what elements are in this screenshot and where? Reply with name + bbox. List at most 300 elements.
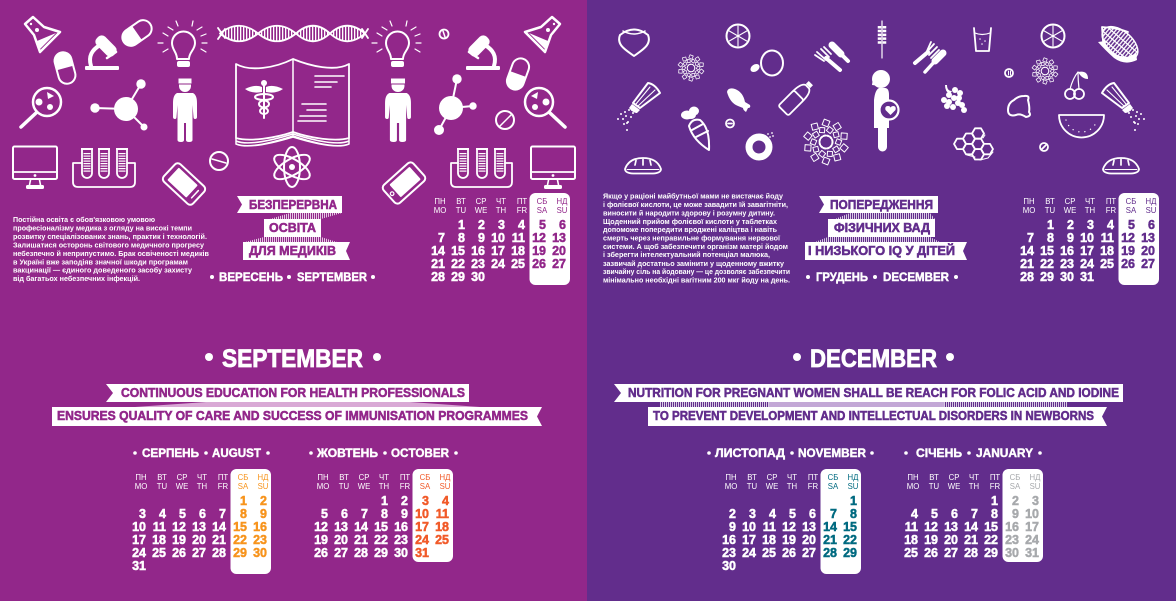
calendar: December 2015: 3: [1087, 218, 1094, 232]
text block: September description: [13, 215, 209, 283]
calendar: October 2015: 20: [334, 533, 348, 547]
calendar: October 2015: FR: [400, 482, 411, 491]
text block: December description: [603, 192, 790, 284]
calendar: October 2015: 8: [381, 507, 388, 521]
calendar: September 2015: TU: [456, 206, 467, 215]
calendar: January 2016: 2: [1012, 494, 1019, 508]
icon: cherries: [1065, 72, 1088, 99]
calendar: September 2015: 3: [498, 218, 505, 232]
text block: September description: Постійна освіта є обов'язковою умовою: [13, 215, 155, 224]
calendar: August 2015: 7: [219, 507, 226, 521]
calendar: November 2015: 14: [823, 520, 837, 534]
calendar: October 2015: 1: [381, 494, 388, 508]
calendar: August 2015: НД: [258, 473, 269, 482]
calendar: September 2015: [431, 193, 570, 285]
title: September: SEPTEMBER: [222, 345, 363, 373]
calendar: November 2015: 11: [763, 520, 776, 534]
icon: test tubes left: [73, 148, 135, 187]
calendar: November 2015: НД: [848, 473, 859, 482]
calendar: October 2015: TH: [379, 482, 389, 491]
month line: September: [210, 270, 375, 284]
calendar: October 2015: 4: [442, 494, 449, 508]
calendar: September 2015: 1: [458, 218, 465, 232]
month line: September: SEPTEMBER: [297, 270, 367, 284]
calendar: January 2016: 12: [924, 520, 938, 534]
calendar: October 2015: 12: [314, 520, 328, 534]
calendar: December 2015: 16: [1060, 244, 1074, 258]
calendar: September 2015: СБ: [537, 197, 547, 206]
icon: pill upper left: [53, 50, 77, 86]
calendar: August 2015: TH: [197, 482, 207, 491]
calendar: November 2015: 7: [830, 507, 837, 521]
text block: September description: вакцинації — єдиного доведеного засобу захисту: [13, 266, 193, 275]
calendar: January 2016: TH: [969, 482, 979, 491]
icon: citrus right: [1042, 24, 1064, 48]
ribbon heading: December Ukrainian: [805, 196, 967, 260]
calendar: October 2015: SU: [440, 482, 451, 491]
calendar: August 2015: 23: [253, 533, 267, 547]
calendar: November 2015: 27: [802, 546, 816, 560]
ribbon: December English: NUTRITION FOR PREGNANT WOMEN SHALL BE REACH FOR FOLIC ACID AND IODINE: [628, 386, 1119, 400]
calendar: November 2015: 16: [722, 533, 736, 547]
calendar: October 2015: 11: [436, 507, 449, 521]
icon: test tubes right: [451, 148, 512, 187]
calendar: November 2015: 1: [850, 494, 857, 508]
calendar: September 2015: 11: [512, 231, 525, 245]
calendar: October 2015: 3: [422, 494, 429, 508]
calendar: September 2015: 5: [539, 218, 546, 232]
calendar: September 2015: SA: [537, 206, 548, 215]
calendar: September 2015: WE: [475, 206, 487, 215]
calendar: August 2015: 6: [199, 507, 206, 521]
calendar: November 2015: 21: [823, 533, 837, 547]
icon: citrus left: [726, 24, 750, 48]
icon: chestnut: [619, 30, 649, 56]
calendar: October 2015: 27: [334, 546, 348, 560]
calendar: September 2015: 19: [532, 244, 546, 258]
calendar: November 2015: СР: [767, 473, 777, 482]
calendar: January 2016: 17: [1025, 520, 1039, 534]
calendar: September 2015: 23: [471, 257, 485, 271]
calendar: December 2015: WE: [1064, 206, 1076, 215]
calendar: September 2015: 13: [552, 231, 566, 245]
calendar: September 2015: 9: [478, 231, 485, 245]
calendar: October 2015: 19: [314, 533, 328, 547]
calendar: August 2015: MO: [135, 482, 147, 491]
calendar: December 2015: MO: [1023, 206, 1035, 215]
icon: magnifier right: [525, 88, 565, 127]
icons: medical illustration group: [13, 17, 575, 206]
calendar: January 2016: 5: [931, 507, 938, 521]
calendar: December 2015: 7: [1027, 231, 1034, 245]
icon: doctor right: [385, 78, 411, 142]
text block: September description: в Україні вже заподіяв значної шкоди програмам: [13, 257, 188, 266]
calendar: November 2015: TU: [747, 482, 758, 491]
calendar: September 2015: НД: [557, 197, 568, 206]
calendar: October 2015: 21: [354, 533, 368, 547]
calendar: October 2015: 9: [401, 507, 408, 521]
calendar: January 2016: 24: [1025, 533, 1039, 547]
calendar: September 2015: 30: [471, 270, 485, 284]
calendar: September 2015: 25: [511, 257, 525, 271]
calendar: September 2015: СР: [476, 197, 486, 206]
calendar: November 2015: 29: [843, 546, 857, 560]
calendar: August 2015: 2: [260, 494, 267, 508]
calendar: January 2016: 18: [904, 533, 918, 547]
calendar: December 2015: 2: [1067, 218, 1074, 232]
calendar: November 2015: 19: [782, 533, 796, 547]
calendar: December 2015: 26: [1121, 257, 1135, 271]
calendar: December 2015: 6: [1148, 218, 1155, 232]
calendar: October 2015: НД: [440, 473, 451, 482]
month line: November: ЛИСТОПАД: [715, 446, 785, 460]
calendar: December 2015: [1020, 193, 1159, 285]
calendar: December 2015: 5: [1128, 218, 1135, 232]
icon: chicken leg: [727, 88, 750, 112]
calendar: August 2015: 20: [192, 533, 206, 547]
icons: nutrition illustration group: [618, 20, 1144, 173]
calendar: January 2016: ПН: [907, 473, 919, 482]
calendar: November 2015: 25: [762, 546, 776, 560]
calendar: August 2015: 1: [240, 494, 247, 508]
calendar: December 2015: FR: [1106, 206, 1117, 215]
calendar: October 2015: 30: [394, 546, 408, 560]
calendar: January 2016: 26: [924, 546, 938, 560]
icon: pill top: [119, 17, 155, 49]
month line: December: ГРУДЕНЬ: [816, 270, 868, 284]
text block: December description: смерть через неправильне формування нервової: [603, 234, 781, 242]
ribbon heading: December Ukrainian: ФІЗИЧНИХ ВАД: [834, 221, 930, 235]
calendar: January 2016: WE: [948, 482, 960, 491]
calendar: October 2015: [314, 469, 453, 562]
icon: small tablet right top: [1005, 69, 1013, 77]
calendar: December 2015: SA: [1126, 206, 1137, 215]
calendar: November 2015: 9: [729, 520, 736, 534]
icon: carrot: [681, 106, 709, 150]
calendar: October 2015: 5: [321, 507, 328, 521]
calendar: November 2015: TH: [787, 482, 797, 491]
calendar: August 2015: 14: [212, 520, 226, 534]
calendar: October 2015: 16: [394, 520, 408, 534]
calendar: September 2015: 20: [552, 244, 566, 258]
panel: September background: [0, 0, 587, 601]
calendar: January 2016: ПТ: [990, 473, 1000, 482]
text block: December description: Якщо у раціоні майбутньої мами не вистачає йоду: [603, 192, 784, 200]
calendar: January 2016: 14: [964, 520, 978, 534]
calendar: October 2015: 29: [374, 546, 388, 560]
calendar: January 2016: 10: [1025, 507, 1039, 521]
calendar: September 2015: 16: [471, 244, 485, 258]
calendar: August 2015: 9: [260, 507, 267, 521]
month line: October: ЖОВТЕНЬ: [316, 446, 378, 460]
icon: DNA helix: [218, 26, 368, 41]
icon: salt shaker left: [618, 83, 660, 130]
calendar: December 2015: 13: [1141, 231, 1155, 245]
calendar: September 2015: 7: [438, 231, 445, 245]
icon: microscope left: [85, 33, 119, 70]
icon: microscope right: [466, 33, 500, 70]
ribbon: September English: [52, 384, 542, 426]
calendar: August 2015: 10: [132, 520, 146, 534]
calendar: October 2015: СР: [359, 473, 369, 482]
calendar: December 2015: TU: [1045, 206, 1056, 215]
calendar: November 2015: ПТ: [808, 473, 818, 482]
icon: light bulb right: [372, 21, 421, 67]
icon: light bulb left: [158, 21, 207, 67]
calendar: December 2015: 4: [1107, 218, 1114, 232]
calendar: December 2015: 20: [1141, 244, 1155, 258]
calendar: September 2015: ЧТ: [496, 197, 506, 206]
calendar: November 2015: 22: [843, 533, 857, 547]
calendar: October 2015: 7: [361, 507, 368, 521]
calendar: October 2015: 22: [374, 533, 388, 547]
icon: caduceus: [245, 80, 283, 118]
icon: watermelon: [1059, 115, 1104, 138]
text block: September description: професіоналізму медика з огляду на високі темпи: [13, 224, 192, 232]
calendar: January 2016: 15: [984, 520, 998, 534]
month line: October: OCTOBER: [391, 446, 449, 460]
calendar: September 2015: ПТ: [517, 197, 527, 206]
calendar: August 2015: SU: [258, 482, 269, 491]
calendar: August 2015: 19: [172, 533, 186, 547]
calendar: November 2015: 28: [823, 546, 837, 560]
calendar: October 2015: 26: [314, 546, 328, 560]
calendar: January 2016: 9: [1012, 507, 1019, 521]
title: December: DECEMBER: [810, 345, 937, 373]
calendar: January 2016: 6: [951, 507, 958, 521]
calendar: January 2016: ВТ: [929, 473, 939, 482]
text block: September description: від багатьох небезпечних інфекцій.: [13, 274, 140, 283]
calendar: December 2015: СБ: [1126, 197, 1136, 206]
month line: November: NOVEMBER: [798, 446, 866, 460]
calendar: December 2015: 22: [1040, 257, 1054, 271]
icon: molecule right: [434, 74, 477, 135]
ribbon heading: December Ukrainian: І НИЗЬКОГО IQ У ДІТЕЙ: [808, 243, 955, 258]
calendar: November 2015: 30: [722, 559, 736, 573]
calendar: September 2015: 6: [559, 218, 566, 232]
icon: tablet right: [496, 111, 514, 129]
calendar: September 2015: 10: [491, 231, 505, 245]
icon: doctor left: [173, 78, 197, 142]
calendar: September 2015: TH: [496, 206, 506, 215]
icon: bottle: [778, 78, 816, 116]
calendar: September 2015: 24: [491, 257, 505, 271]
calendar: October 2015: 14: [354, 520, 368, 534]
calendar: January 2016: 16: [1005, 520, 1019, 534]
calendar: August 2015: SA: [238, 482, 249, 491]
calendar: September 2015: 8: [458, 231, 465, 245]
calendar: October 2015: TU: [339, 482, 350, 491]
icon: flower small right: [1032, 58, 1058, 84]
calendar: August 2015: TU: [157, 482, 168, 491]
calendar: August 2015: 29: [233, 546, 247, 560]
calendar: December 2015: НД: [1146, 197, 1157, 206]
calendar: December 2015: 10: [1080, 231, 1094, 245]
calendar: October 2015: 24: [415, 533, 429, 547]
calendar: September 2015: MO: [434, 206, 446, 215]
calendar: August 2015: [132, 469, 271, 574]
calendar: September 2015: 2: [478, 218, 485, 232]
icon: monitor left: [13, 146, 57, 189]
text block: September description: небезпечно й неприпустимо. Брак освіченості медиків: [13, 249, 209, 258]
ribbon: December English: [614, 384, 1123, 426]
calendar: August 2015: 22: [233, 533, 247, 547]
calendar: November 2015: 24: [742, 546, 756, 560]
calendar: October 2015: 6: [341, 507, 348, 521]
icon: pregnant woman: [872, 70, 898, 152]
calendar: October 2015: ВТ: [339, 473, 349, 482]
calendar: November 2015: WE: [766, 482, 778, 491]
calendar: October 2015: MO: [317, 482, 329, 491]
calendar: August 2015: 26: [172, 546, 186, 560]
calendar: January 2016: FR: [990, 482, 1001, 491]
calendar: October 2015: 13: [334, 520, 348, 534]
icon: honeycomb: [954, 128, 993, 160]
calendar: December 2015: 12: [1121, 231, 1135, 245]
calendar: January 2016: 20: [944, 533, 958, 547]
text block: December description: зазвичай достатньо замінити у щоденному вжитку: [603, 259, 785, 268]
calendar: September 2015: 21: [431, 257, 445, 271]
text block: December description: і фолієвої кислоти, це може завадити їй завагітніти,: [603, 200, 788, 209]
calendar: November 2015: 13: [802, 520, 816, 534]
calendar: November 2015: ВТ: [747, 473, 757, 482]
calendar: August 2015: 25: [152, 546, 166, 560]
icon: phone right: [381, 161, 427, 205]
calendar: October 2015: 17: [415, 520, 429, 534]
calendar: December 2015: 19: [1121, 244, 1135, 258]
calendar: November 2015: 17: [742, 533, 756, 547]
calendar: December 2015: TH: [1085, 206, 1095, 215]
calendar: October 2015: ЧТ: [379, 473, 389, 482]
calendar: November 2015: 8: [850, 507, 857, 521]
calendar: November 2015: 6: [809, 507, 816, 521]
icon: bread left: [625, 158, 661, 174]
calendar: November 2015: 3: [749, 507, 756, 521]
icon: bread right: [1103, 158, 1139, 174]
calendar: December 2015: 25: [1100, 257, 1114, 271]
icon: grapes: [941, 85, 967, 113]
calendar: September 2015: 18: [511, 244, 525, 258]
calendar: August 2015: ЧТ: [197, 473, 207, 482]
calendar: August 2015: 8: [240, 507, 247, 521]
calendar: November 2015: 2: [729, 507, 736, 521]
calendar: January 2016: 25: [904, 546, 918, 560]
calendar: October 2015: 10: [415, 507, 429, 521]
month line: September: ВЕРЕСЕНЬ: [219, 270, 283, 284]
calendar: October 2015: 23: [394, 533, 408, 547]
calendar: October 2015: 15: [374, 520, 388, 534]
text block: December description: виносити й народити здорову і розумну дитину.: [603, 208, 775, 218]
calendar: August 2015: 11: [153, 520, 166, 534]
calendar: January 2016: 7: [971, 507, 978, 521]
calendar: January 2016: СР: [949, 473, 959, 482]
calendar: October 2015: 28: [354, 546, 368, 560]
icon: small tablet bottom: [1040, 143, 1048, 151]
calendar: September 2015: 26: [532, 257, 546, 271]
calendar: December 2015: 18: [1100, 244, 1114, 258]
calendar: January 2016: 23: [1005, 533, 1019, 547]
calendar: January 2016: 30: [1005, 546, 1019, 560]
icon: pill right: [505, 56, 531, 92]
calendar: September 2015: 17: [491, 244, 505, 258]
month line: December: [806, 270, 958, 284]
text block: September description: Залишатися осторонь світового медичного прогресу: [13, 240, 205, 249]
calendar: August 2015: 4: [159, 507, 166, 521]
icon: flask right: [525, 17, 560, 52]
calendar: November 2015: 18: [762, 533, 776, 547]
icon: open book with caduceus: [236, 59, 349, 146]
icon: phone left: [161, 162, 207, 206]
calendar: September 2015: 29: [451, 270, 465, 284]
calendar: August 2015: ВТ: [157, 473, 167, 482]
calendar: October 2015: 2: [401, 494, 408, 508]
calendar: August 2015: СБ: [238, 473, 248, 482]
text block: December description: Щоденний прийом фолієвої кислоти у таблетках: [603, 217, 777, 226]
calendar: December 2015: 29: [1040, 270, 1054, 284]
icon: fork and knife left: [815, 45, 848, 70]
calendar: November 2015: FR: [808, 482, 819, 491]
icon: tablet small top: [440, 30, 448, 38]
calendar: January 2016: 31: [1025, 546, 1039, 560]
calendar: August 2015: 13: [192, 520, 206, 534]
calendar: October 2015: WE: [358, 482, 370, 491]
panel: December background: [587, 0, 1176, 601]
calendar: November 2015: СБ: [828, 473, 838, 482]
calendar: September 2015: ПН: [434, 197, 446, 206]
calendar: October 2015: 25: [435, 533, 449, 547]
calendar: January 2016: 4: [911, 507, 918, 521]
icon: fork and knife right: [915, 42, 943, 72]
calendar: October 2015: SA: [420, 482, 431, 491]
calendar: November 2015: SA: [828, 482, 839, 491]
calendar: August 2015: 12: [172, 520, 186, 534]
calendar: November 2015: ЧТ: [787, 473, 797, 482]
calendar: December 2015: 15: [1040, 244, 1054, 258]
calendar: December 2015: ПН: [1023, 197, 1035, 206]
calendar: August 2015: 28: [212, 546, 226, 560]
calendar: January 2016: СБ: [1010, 473, 1020, 482]
calendar: December 2015: SU: [1146, 206, 1157, 215]
calendar: September 2015: FR: [517, 206, 528, 215]
calendar: December 2015: 28: [1020, 270, 1034, 284]
icon: magnifier left: [21, 88, 61, 127]
calendar: August 2015: 31: [132, 559, 146, 573]
calendar: December 2015: 24: [1080, 257, 1094, 271]
icon: salt shaker right: [1102, 83, 1144, 130]
calendar: December 2015: ПТ: [1106, 197, 1116, 206]
month line: August: СЕРПЕНЬ: [142, 446, 199, 460]
ribbon heading: September Ukrainian: БЕЗПЕРЕРВНА: [249, 198, 337, 212]
calendar: December 2015: 17: [1080, 244, 1094, 258]
calendar: August 2015: 24: [132, 546, 146, 560]
calendar: September 2015: 14: [431, 244, 445, 258]
calendar: August 2015: ПТ: [218, 473, 228, 482]
calendar: January 2016: 11: [905, 520, 918, 534]
calendar: August 2015: 21: [212, 533, 226, 547]
calendar: October 2015: 31: [415, 546, 429, 560]
calendar: December 2015: 11: [1101, 231, 1114, 245]
calendar: September 2015: 28: [431, 270, 445, 284]
calendar: December 2015: 9: [1067, 231, 1074, 245]
calendar: November 2015: SU: [848, 482, 859, 491]
calendar: September 2015: 4: [518, 218, 525, 232]
calendar: August 2015: 15: [233, 520, 247, 534]
calendar: October 2015: ПН: [317, 473, 329, 482]
calendar: January 2016: 27: [944, 546, 958, 560]
calendar: October 2015: СБ: [420, 473, 430, 482]
calendar: January 2016: 1: [991, 494, 998, 508]
calendar: January 2016: 28: [964, 546, 978, 560]
